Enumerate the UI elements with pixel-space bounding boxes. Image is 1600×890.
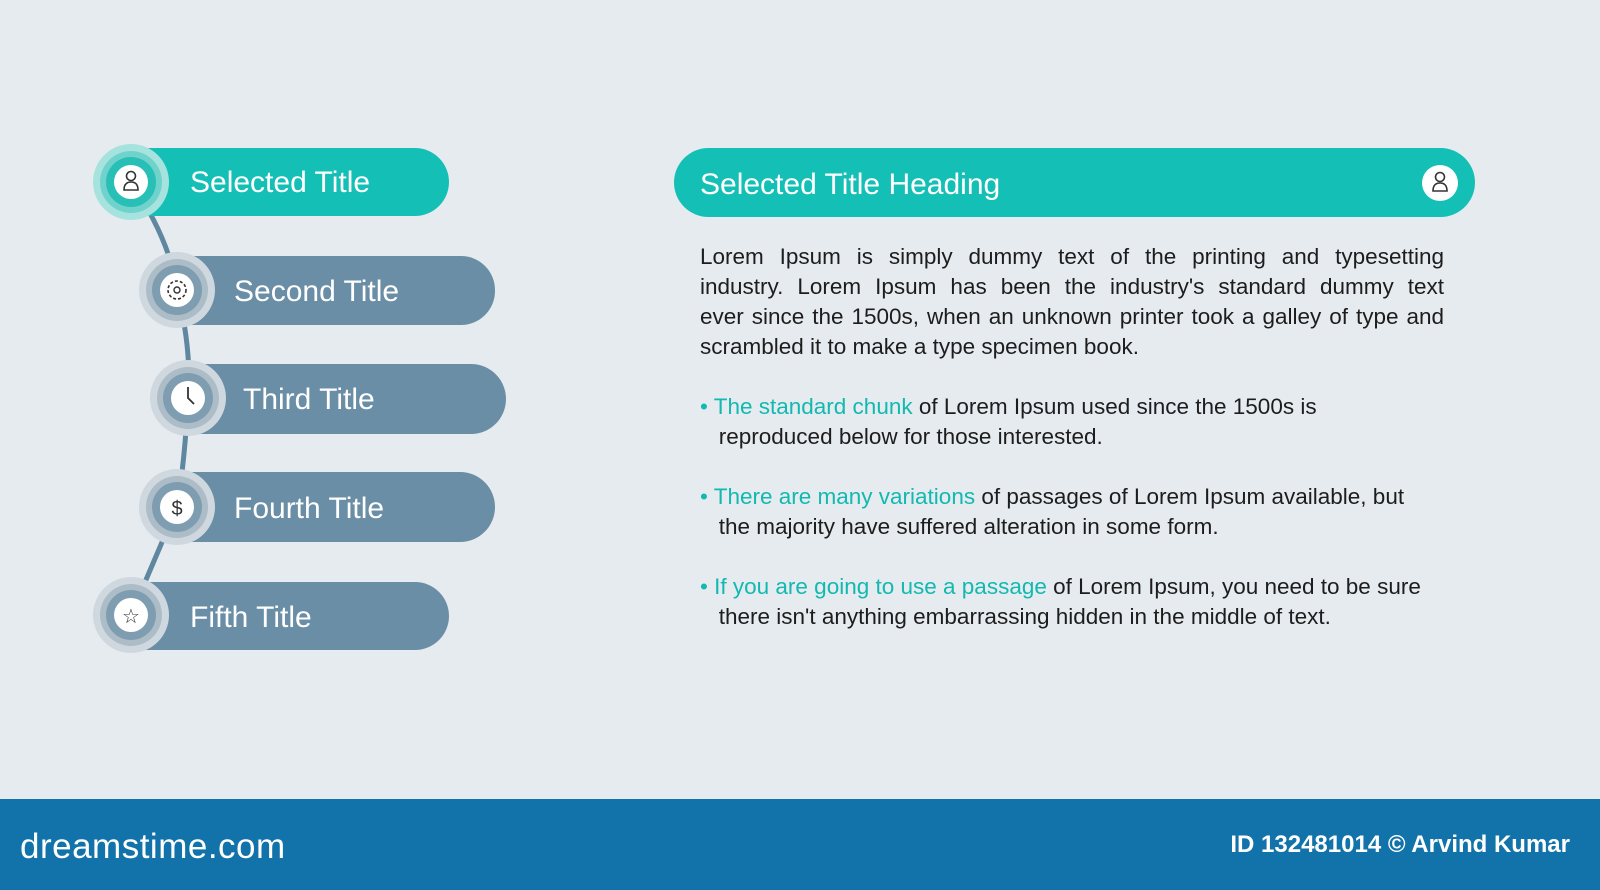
footer logo: dreamstime.com	[20, 827, 286, 866]
body paragraph: industry. Lorem Ipsum has been the industry's standard dummy text	[700, 274, 1444, 299]
icon: gear	[139, 252, 215, 328]
pill: selected title	[140, 148, 449, 216]
bullet 1: reproduced below for those interested.	[719, 424, 1103, 449]
body paragraph: ever since the 1500s, when an unknown printer took a galley of type and	[700, 304, 1444, 329]
body paragraph: Lorem Ipsum is simply dummy text of the printing and typesetting	[700, 244, 1444, 269]
footer credit: ID 132481014 © Arvind Kumar	[1230, 831, 1570, 858]
bullet 1: • The standard chunk of Lorem Ipsum used since the 1500s is	[700, 394, 1317, 419]
pill: second title: Second Title	[234, 275, 399, 308]
pill: fourth title: Fourth Title	[234, 492, 384, 525]
icon: user (selected)	[93, 144, 169, 220]
heading bar	[674, 148, 1475, 217]
icon: star: ☆	[122, 606, 140, 628]
icon: clock	[150, 360, 226, 436]
icon: dollar: $	[171, 498, 183, 520]
pill: third title: Third Title	[243, 383, 375, 416]
pill: second title	[186, 256, 495, 325]
bullet 3: • If you are going to use a passage of Lorem Ipsum, you need to be sure	[700, 574, 1421, 599]
footer bar	[0, 799, 1600, 890]
connector line	[131, 182, 189, 615]
body paragraph	[700, 244, 1444, 359]
icon: star	[93, 577, 169, 653]
pill: fifth title	[140, 582, 449, 650]
body paragraph: scrambled it to make a type specimen book.	[700, 334, 1139, 359]
bullet 2: • There are many variations of passages of Lorem Ipsum available, but	[700, 484, 1404, 509]
icon: dollar	[139, 469, 215, 545]
bullet 3: there isn't anything embarrassing hidden in the middle of text.	[719, 604, 1331, 629]
bullet 3	[700, 574, 1421, 629]
pill: selected title: Selected Title	[190, 166, 370, 199]
pill: third title	[197, 364, 506, 434]
bullet 1	[700, 394, 1317, 449]
heading bar: Selected Title Heading	[700, 168, 1000, 201]
bullet 2	[700, 484, 1404, 539]
pill: fourth title	[186, 472, 495, 542]
bullet 2: the majority have suffered alteration in some form.	[719, 514, 1219, 539]
pill: fifth title: Fifth Title	[190, 601, 312, 634]
